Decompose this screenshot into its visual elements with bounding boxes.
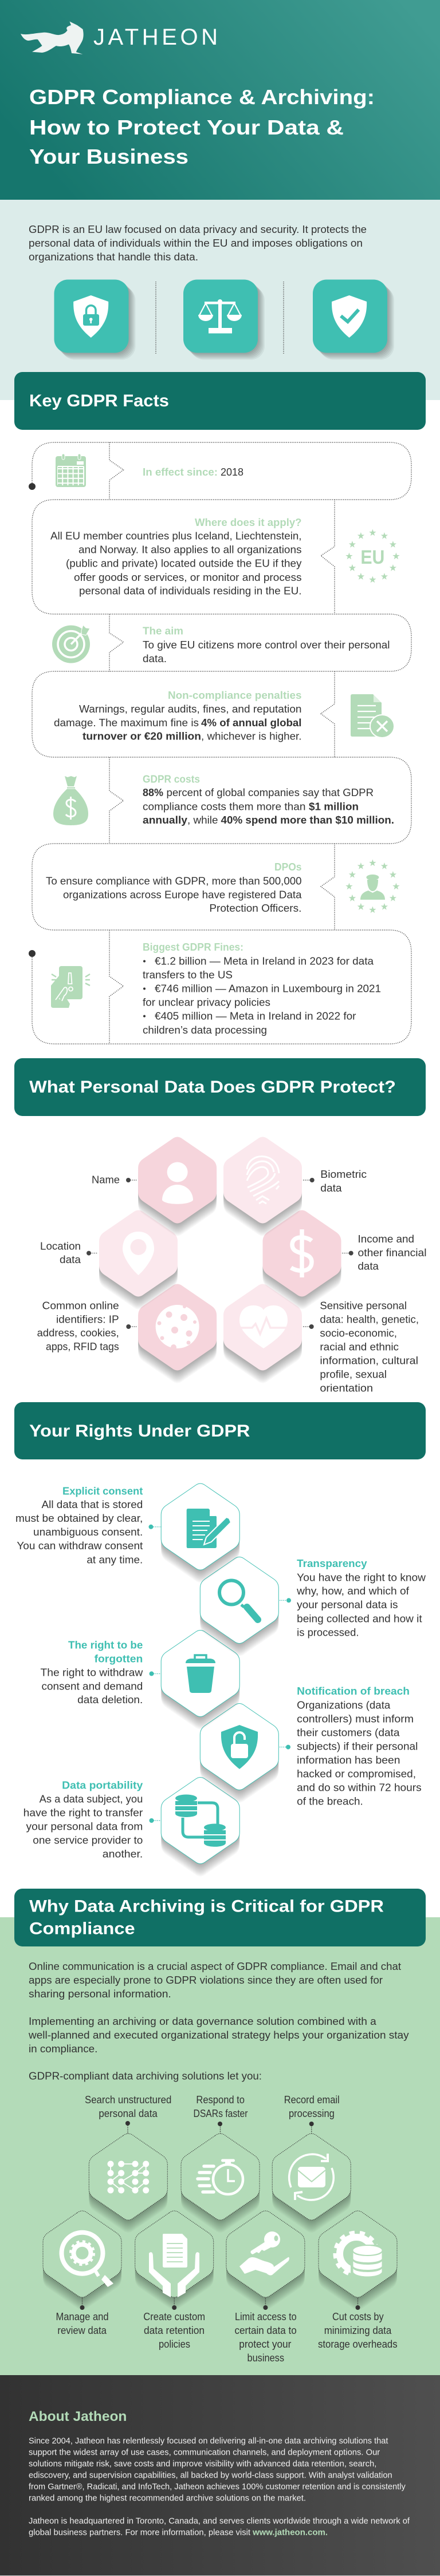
right: data portability: one service provider to (33, 1834, 143, 1846)
label: income (342, 1233, 426, 1272)
fact: the aim: The aim (143, 626, 183, 637)
logo: Jatheon fox and wordmark: JATHEON (93, 25, 218, 50)
label: sensitive data: racial and ethnic (320, 1342, 399, 1353)
label: sensitive data: socio-economic, (320, 1328, 397, 1339)
right: explicit consent: must be obtained by clear, (15, 1513, 143, 1524)
fact: GDPR costs: annually (143, 814, 187, 826)
right: to be forgotten: consent and demand (41, 1680, 143, 1692)
section heading: Key GDPR Facts (14, 372, 426, 430)
title (29, 85, 375, 168)
label: respond to DSARs: DSARs faster (194, 2108, 248, 2119)
label: limit access: Limit access to (235, 2311, 297, 2322)
icon: phone alert in hand (51, 966, 90, 1008)
fact: biggest GDPR fines: children’s data processing (143, 1024, 267, 1036)
label: manage and review: review data (57, 2325, 107, 2336)
label: search unstructured (85, 2094, 171, 2119)
label: location data: data (60, 1254, 81, 1265)
section heading: Why Data Archiving: Why Data Archiving is Critical for GDPR (29, 1897, 384, 1916)
right: to be forgotten: The right to withdraw (40, 1667, 143, 1678)
fact: the aim: To give EU citizens more control over their personal (143, 639, 390, 651)
label: online identifiers: address, cookies, (37, 1327, 119, 1339)
footer: About Jatheon: About Jatheon (29, 2409, 127, 2424)
title: GDPR Compliance & Archiving: (29, 85, 375, 109)
divider line (283, 282, 284, 354)
label: location data (40, 1241, 98, 1265)
fact: DPOs: Protection Officers. (209, 903, 301, 914)
label: income: Income and (358, 1233, 414, 1245)
right: notification of breach: subjects) if their personal (297, 1740, 418, 1752)
label: search unstructured: personal data (99, 2108, 158, 2119)
label: sensitive data: data: health, genetic, (320, 1314, 419, 1325)
right: to be forgotten (40, 1639, 161, 1706)
archiving panel background (0, 1917, 440, 2375)
fact: non-compliance penalties: damage. The maximum fine is (54, 717, 199, 729)
section heading: Your Rights: Your Rights Under GDPR (29, 1422, 250, 1441)
right: data portability: have the right to transfer (23, 1807, 143, 1818)
footer: About Jatheon: support the widest array of use cases, communication channels, and deployment options. Our (29, 2448, 380, 2457)
title: How to Protect Your Data & (29, 116, 344, 139)
fact: where does it apply: (public and private) located outside the EU if they (66, 558, 301, 569)
right: transparency: being collected and how it (297, 1613, 422, 1624)
label: biometric data: Biometric (320, 1169, 367, 1180)
intro text (29, 224, 367, 263)
archiving body text: Implementing an archiving or data governance solution combined with a (29, 2016, 377, 2027)
right: to be forgotten: The right to be (68, 1639, 143, 1651)
label: biometric data: data (320, 1182, 343, 1194)
fact: GDPR costs: $1 million (309, 801, 359, 812)
fact: in effect since: 2018 (221, 466, 243, 478)
right: transparency: You have the right to know (297, 1572, 426, 1583)
hexagon: explicit consent (161, 1483, 239, 1582)
hexagon: data retention policies (135, 2211, 214, 2310)
label: limit access: certain data to (235, 2325, 297, 2336)
footer: About Jatheon: from Gartner®, Radicati, and InfoTech, Jatheon achieves 100% customer retention and is consistently (29, 2482, 406, 2491)
fact: non-compliance penalties: 4% of annual global (201, 717, 301, 729)
footer: About Jatheon: Since 2004, Jatheon has relentlessly focused on delivering all-in-one data archiving solutions that (29, 2436, 388, 2446)
fact: biggest GDPR fines: Biggest GDPR Fines: (143, 941, 243, 953)
fact: where does it apply: personal data of individuals residing in the EU. (79, 585, 301, 597)
label: sensitive data: Sensitive personal (320, 1300, 407, 1312)
label: sensitive data: information, cultural (320, 1355, 418, 1367)
right: transparency: your personal data is (297, 1599, 398, 1611)
hexagon: cut costs (319, 2211, 397, 2310)
label: cut costs: storage overheads (318, 2338, 398, 2350)
fact: non-compliance penalties: , whichever is higher. (201, 730, 301, 742)
fact: DPOs: organizations across Europe have registered Data (63, 889, 302, 901)
right: transparency: Transparency (297, 1558, 367, 1569)
label: record email: processing (289, 2108, 335, 2119)
footer: About Jatheon: solutions mitigate risk, save costs and improve visibility with advanced data retention, search, (29, 2459, 376, 2468)
label: record email (284, 2094, 340, 2119)
hexagon: heart with pulse (223, 1284, 302, 1383)
right: notification of breach: Organizations (data (297, 1699, 391, 1711)
fact: GDPR costs: GDPR costs (143, 774, 200, 785)
icon: EU stars (345, 529, 400, 583)
right: notification of breach: information has been (297, 1754, 400, 1766)
divider line (155, 282, 156, 354)
fact: the aim (52, 625, 390, 664)
right: notification of breach (280, 1685, 422, 1807)
icon: officer in star ring (345, 860, 400, 913)
icon: target (52, 625, 90, 663)
hexagon: right to be forgotten (161, 1630, 239, 1730)
icon: money bag (53, 776, 88, 825)
icon: document with X (351, 694, 394, 738)
archiving body text: GDPR-compliant data archiving solutions let you: (29, 2070, 262, 2082)
right: data portability: Data portability (62, 1779, 143, 1791)
fact: biggest GDPR fines (51, 941, 381, 1036)
icon: balance scales (183, 279, 265, 359)
label: record email: Record email (284, 2094, 340, 2106)
right: explicit consent: All data that is stored (41, 1499, 143, 1510)
archiving body text: well-planned and executed organizational strategy helps your organization stay (28, 2029, 409, 2041)
fact: biggest GDPR fines: €405 million — Meta in Ireland in 2022 for (155, 1011, 356, 1022)
label: cut costs: minimizing data (324, 2325, 392, 2336)
label: online identifiers: Common online (42, 1300, 119, 1312)
personal data hexagons (37, 1137, 426, 1394)
icon: shield with lock (54, 279, 135, 359)
section heading: Key GDPR Facts: Key GDPR Facts (29, 391, 169, 410)
label: sensitive data (303, 1300, 419, 1394)
timeline dotted path (29, 442, 411, 1044)
label: search unstructured: Search unstructured (85, 2094, 171, 2106)
hexagon: dollar (262, 1210, 341, 1309)
fact: non-compliance penalties: Non-compliance penalties (168, 690, 301, 701)
right: to be forgotten: data deletion. (77, 1694, 143, 1706)
right: data portability: another. (103, 1848, 143, 1859)
label: manage and review (56, 2311, 109, 2336)
archiving body text: sharing personal information. (29, 1988, 171, 2000)
label: retention policies (143, 2311, 205, 2350)
right: notification of breach: controllers) must inform (297, 1713, 414, 1724)
label: income: data (358, 1261, 379, 1272)
label: income: other financial (358, 1247, 426, 1259)
fact: DPOs: DPOs (274, 861, 301, 873)
label: respond to DSARs (194, 2094, 248, 2119)
fact: the aim: data. (143, 653, 167, 664)
section heading: Your Rights (14, 1402, 426, 1459)
fact: biggest GDPR fines: €1.2 billion — Meta in Ireland in 2023 for data (155, 956, 374, 967)
title: Your Business (29, 145, 188, 168)
section heading: What Personal Data: What Personal Data Does GDPR Protect? (29, 1078, 396, 1097)
right: transparency: why, how, and which of (296, 1585, 410, 1597)
hexagon: location pin (99, 1210, 178, 1309)
fact: biggest GDPR fines: for unclear privacy policies (143, 997, 270, 1008)
hexagon: transparency (200, 1557, 278, 1656)
fact: GDPR costs: 88% (143, 787, 163, 798)
hexagon: record email (272, 2134, 351, 2233)
fact: DPOs (46, 860, 400, 914)
label: limit access: protect your (239, 2338, 291, 2350)
right: notification of breach: their customers (data (297, 1727, 400, 1738)
right: explicit consent: You can withdraw consent (17, 1540, 143, 1552)
label: retention policies: Create custom (143, 2311, 205, 2322)
archiving body text: in compliance. (29, 2043, 97, 2055)
label: limit access (235, 2311, 297, 2364)
rights hexagons (15, 1483, 426, 1876)
footer: About Jatheon: ediscovery, and supervision capabilities, all backed by world-class support. With analyst validation (29, 2471, 392, 2480)
label: online identifiers: apps, RFID tags (46, 1341, 119, 1352)
right: notification of breach: hacked or compromised, (297, 1768, 416, 1779)
label: sensitive data: orientation (320, 1383, 373, 1394)
fact: GDPR costs: percent of global companies say that GDPR (166, 787, 374, 798)
fact: non-compliance penalties: Warnings, regular audits, fines, and reputation (79, 703, 301, 715)
section heading: What Personal Data (14, 1058, 426, 1116)
hexagon: person (138, 1137, 217, 1236)
archiving hexagons (43, 2094, 398, 2364)
label: manage and review: Manage and (56, 2311, 109, 2322)
intro text: GDPR is an EU law focused on data privacy and security. It protects the (29, 224, 367, 235)
right: notification of breach: of the breach. (297, 1795, 363, 1807)
right: explicit consent: at any time. (87, 1554, 143, 1566)
label: retention policies: policies (159, 2338, 190, 2350)
footer: About Jatheon: global business partners. For more information, please visit (29, 2528, 250, 2537)
footer: About Jatheon: www.jatheon.com. (252, 2528, 328, 2537)
label: cut costs: Cut costs by (332, 2311, 384, 2322)
label: retention policies: data retention (144, 2325, 205, 2336)
hexagon: cookie (138, 1284, 217, 1383)
right: explicit consent (15, 1485, 161, 1566)
fact: biggest GDPR fines: transfers to the US (143, 970, 233, 981)
hexagon: search unstructured (89, 2134, 167, 2233)
logo: Jatheon fox and wordmark (21, 22, 218, 54)
label: cut costs (318, 2311, 398, 2350)
label: name: Name (92, 1174, 120, 1186)
fact: GDPR costs: , while (187, 814, 218, 826)
intro text: personal data of individuals within the EU and imposes obligations on (29, 238, 363, 249)
footer: About Jatheon: Jatheon is headquartered in Toronto, Canada, and serves clients worldwide through a wide network of (29, 2516, 410, 2526)
icon: shield with check (313, 279, 394, 359)
fact: GDPR costs: compliance costs them more than (143, 801, 305, 812)
right: data portability: As a data subject, you (40, 1793, 143, 1805)
fact: where does it apply: All EU member countries plus Iceland, Liechtenstein, (50, 530, 301, 541)
intro panel (0, 200, 440, 400)
label: biometric data (303, 1169, 367, 1194)
fact: where does it apply: Where does it apply? (195, 517, 301, 528)
footer: About Jatheon: ranked among the highest recommended archive solutions on the market. (29, 2494, 306, 2503)
hexagon: data portability (161, 1778, 239, 1876)
fact: non-compliance penalties (54, 690, 394, 742)
label: respond to DSARs: Respond to (196, 2094, 245, 2106)
section heading: Why Data Archiving: Compliance (29, 1919, 135, 1938)
hexagon: fingerprint (223, 1137, 302, 1236)
fact: where does it apply (50, 517, 400, 597)
label: name (92, 1174, 138, 1186)
right: to be forgotten: forgotten (95, 1653, 143, 1664)
hexagon: manage and review data (43, 2211, 121, 2310)
hexagon: notification of breach (200, 1703, 278, 1803)
fact: where does it apply: offer goods or services, or monitor and process (74, 572, 301, 583)
connector dots (80, 2121, 360, 2310)
fact: DPOs: To ensure compliance with GDPR, more than 500,000 (46, 876, 301, 887)
right: notification of breach: and do so within 72 hours (297, 1782, 422, 1793)
hexagon: limit access (226, 2211, 305, 2310)
section heading: Why Data Archiving (14, 1889, 426, 1946)
archiving body text: Online communication is a crucial aspect of GDPR compliance. Email and chat (29, 1961, 401, 1972)
right: explicit consent: Explicit consent (62, 1485, 143, 1497)
right: transparency: is processed. (297, 1627, 359, 1638)
label: limit access: business (247, 2352, 284, 2364)
hexagon: respond to DSARs (181, 2134, 260, 2233)
fact: biggest GDPR fines: €746 million — Amazon in Luxembourg in 2021 (155, 983, 381, 995)
fact: GDPR costs (53, 774, 394, 826)
label: online identifiers (37, 1300, 138, 1352)
icon: EU stars: EU (360, 547, 384, 568)
archiving body text: apps are especially prone to GDPR violations since they are often used for (29, 1974, 383, 1986)
right: notification of breach: Notification of breach (297, 1685, 410, 1697)
fact: GDPR costs: 40% spend more than $10 million. (221, 814, 394, 826)
footer: About Jatheon (0, 2375, 440, 2576)
fact: non-compliance penalties: turnover or €20 million (82, 730, 201, 742)
label: sensitive data: profile, sexual (320, 1369, 387, 1380)
right: data portability (23, 1779, 161, 1859)
fact: where does it apply: and Norway. It also applies to all organizations (78, 544, 301, 556)
intro text: organizations that handle this data. (29, 251, 198, 263)
right: data portability: your personal data from (26, 1821, 143, 1832)
archiving body text (28, 1961, 409, 2082)
right: transparency (280, 1558, 426, 1638)
label: online identifiers: identifiers: IP (56, 1313, 119, 1325)
right: explicit consent: unambiguous consent. (33, 1526, 143, 1538)
fact: in effect since (56, 454, 243, 487)
label: location data: Location (40, 1241, 81, 1252)
header banner (0, 0, 440, 200)
fact: in effect since: In effect since: (143, 466, 218, 478)
icon: calendar (56, 454, 86, 487)
